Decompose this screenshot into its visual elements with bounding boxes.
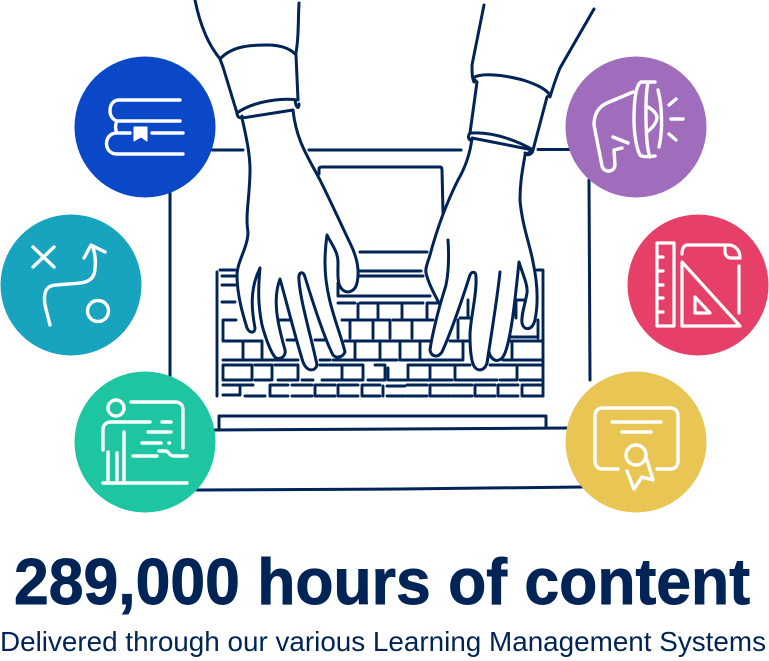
icon: ruler and set square	[657, 243, 740, 326]
icon: books	[106, 100, 183, 154]
icon: megaphone	[594, 82, 683, 171]
circle: strategy	[0, 214, 142, 356]
icon: strategy play	[33, 245, 108, 325]
keyboard	[217, 270, 543, 396]
laptop outline	[170, 150, 590, 490]
right hand finger lines	[440, 240, 500, 363]
right arm and hand	[426, 5, 594, 370]
circle: megaphone	[566, 56, 706, 198]
circle: instructor	[74, 372, 216, 512]
right cuff	[470, 75, 550, 150]
left cuff	[220, 45, 298, 113]
right hand silhouette	[426, 138, 537, 370]
subtitle: Delivered through our various Learning Management Systems	[0, 626, 766, 657]
right sleeve	[472, 5, 594, 97]
icon: instructor at board	[103, 400, 187, 483]
left sleeve	[195, 0, 299, 60]
title: 289,000 hours of content	[14, 545, 750, 618]
circle: certificate	[566, 372, 706, 512]
left arm and hand	[195, 0, 358, 370]
left hand silhouette	[237, 110, 358, 370]
circle: design tools	[628, 214, 768, 356]
circle: books	[74, 56, 216, 198]
icon: certificate	[595, 408, 678, 489]
